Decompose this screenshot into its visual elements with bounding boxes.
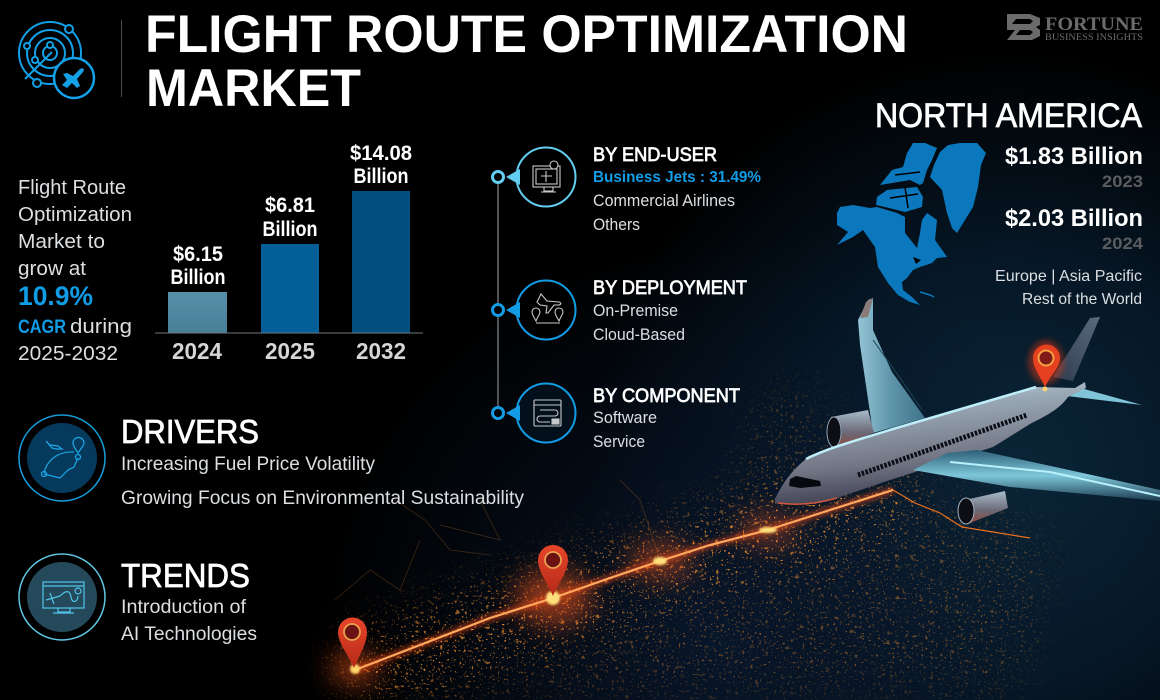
- panel: trends: AI Technologies: [121, 623, 257, 645]
- fuselage: [775, 382, 1086, 505]
- panel: trends: Introduction of: [121, 596, 247, 618]
- segment: by end-user: Commercial Airlines: [593, 192, 735, 210]
- bar value labels: Billion: [354, 165, 408, 188]
- segment: by component: BY COMPONENT: [593, 385, 740, 407]
- icon: monitor with plane: [492, 148, 576, 206]
- cockpit windows: [789, 476, 821, 488]
- fuselage highlight: [806, 387, 1036, 459]
- fuselage belly glow: [778, 498, 837, 504]
- CAGR text block: Optimization: [18, 204, 132, 226]
- panel: North America values: 2024: [1102, 234, 1144, 253]
- bar 2025: [261, 244, 319, 333]
- panel: drivers: DRIVERS: [121, 413, 259, 450]
- cabin windows: [858, 415, 1027, 475]
- year labels: [172, 338, 406, 364]
- bar value labels: Billion: [262, 218, 318, 241]
- icon: monitor route: [19, 554, 105, 640]
- CAGR text block: Market to: [18, 231, 105, 253]
- panel: drivers: Growing Focus on Environmental Sustainability: [121, 487, 524, 509]
- panel: trends: [19, 554, 257, 645]
- CAGR text block: during: [70, 316, 132, 338]
- far wing: [858, 298, 925, 433]
- right engine: [958, 491, 1008, 524]
- bar value labels: Billion: [170, 266, 226, 289]
- bar value labels: [170, 142, 412, 289]
- near wing: [913, 450, 1160, 501]
- panel: North America values: Europe | Asia Pacific: [995, 268, 1142, 285]
- bar value labels: $6.81: [265, 194, 315, 217]
- CAGR text block: Flight Route: [18, 177, 126, 199]
- segment timeline line: [497, 177, 499, 413]
- segment: by deployment: BY DEPLOYMENT: [593, 277, 747, 299]
- title: FLIGHT ROUTE OPTIMIZATION: [145, 5, 908, 64]
- segment: by deployment: On-Premise: [593, 302, 678, 320]
- panel: drivers: [19, 413, 524, 509]
- logo: Fortune Business Insights: [1007, 14, 1143, 43]
- icon: browser route: [492, 384, 576, 442]
- logo: Fortune Business Insights: FORTUNE: [1045, 14, 1143, 35]
- panel: North America values: NORTH AMERICA: [875, 97, 1142, 135]
- year labels: 2032: [356, 338, 406, 364]
- icon: radar with plane: [19, 22, 94, 98]
- segment: by component: Service: [593, 433, 645, 451]
- segment: by deployment: Cloud-Based: [593, 326, 685, 344]
- map: North America: [837, 143, 986, 305]
- bar 2024: [168, 292, 227, 333]
- panel: North America values: $1.83 Billion: [1005, 143, 1143, 170]
- title: MARKET: [146, 59, 361, 118]
- year labels: 2024: [172, 338, 222, 364]
- left engine: [827, 410, 874, 447]
- panel: drivers: Increasing Fuel Price Volatility: [121, 453, 375, 475]
- CAGR text block: 10.9%: [18, 281, 93, 311]
- icon: map pin on tail: [1028, 340, 1064, 392]
- CAGR text block: 2025-2032: [18, 343, 118, 365]
- segment: by component: [492, 384, 740, 451]
- CAGR text block: CAGR: [18, 317, 66, 338]
- header divider: [120, 20, 122, 97]
- panel: North America values: 2023: [1102, 172, 1143, 191]
- tail fin: [1053, 317, 1100, 381]
- bar chart: market size: [155, 142, 423, 364]
- panel: trends: TRENDS: [121, 557, 250, 594]
- logo: Fortune Business Insights: BUSINESS INSIGHTS: [1045, 33, 1143, 43]
- segment: by end-user: Others: [593, 216, 640, 234]
- bar value labels: $6.15: [173, 243, 223, 266]
- flight route line with glowing waypoints: [331, 490, 1030, 684]
- icon: route to pin: [19, 415, 105, 501]
- segment: by end-user: [492, 144, 761, 234]
- bar value labels: $14.08: [350, 142, 412, 165]
- year labels: 2025: [265, 338, 315, 364]
- panel: North America values: [875, 97, 1144, 308]
- title: [145, 5, 908, 118]
- bar 2032: [352, 191, 410, 333]
- panel: North America values: Rest of the World: [1022, 291, 1142, 308]
- icon: map pin 1: [338, 618, 367, 668]
- airplane illustration: [775, 298, 1160, 524]
- CAGR text block: grow at: [18, 258, 86, 280]
- segment: by deployment: [492, 277, 747, 344]
- panel: North America values: $2.03 Billion: [1005, 205, 1143, 232]
- horizontal stabilizer: [1067, 387, 1142, 405]
- CAGR text block: [18, 177, 132, 365]
- segment: by end-user: BY END-USER: [593, 144, 717, 166]
- icon: map pin 2: [538, 545, 568, 596]
- background: night map: [309, 95, 1160, 700]
- segment: by end-user: Business Jets : 31.49%: [593, 169, 761, 186]
- segment: by component: Software: [593, 409, 657, 427]
- icon: plane with pins: [492, 280, 576, 340]
